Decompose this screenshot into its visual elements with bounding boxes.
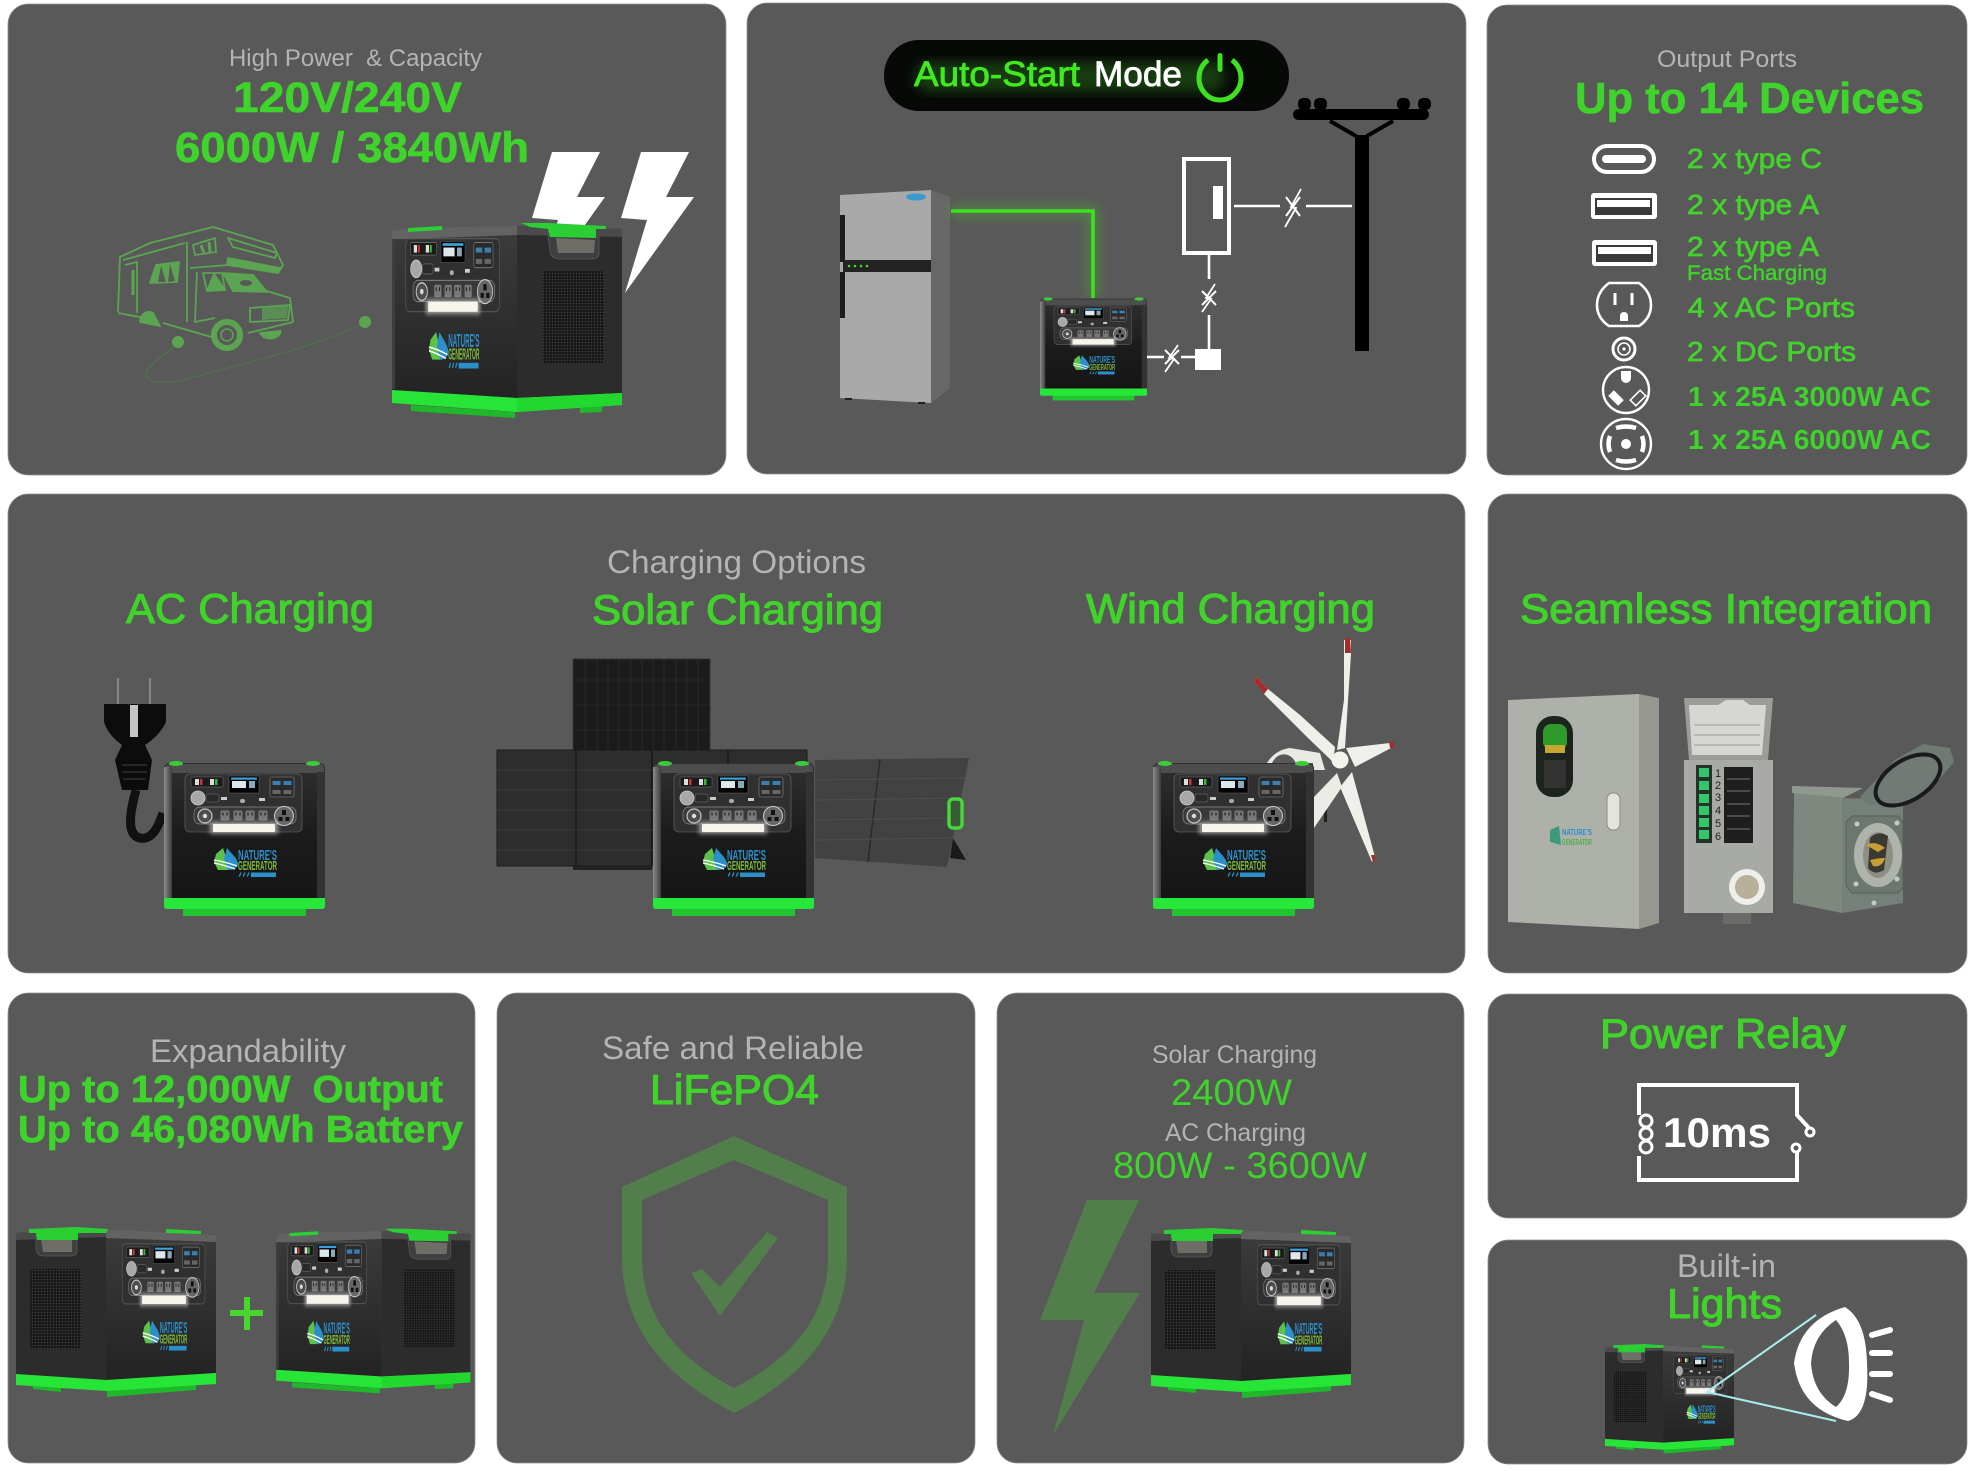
breaker panel: 3: [1715, 792, 1721, 804]
green power line: [951, 211, 1093, 298]
port label: type A fast charging: Fast Charging: [1687, 262, 1827, 285]
panel: safe and reliable: [497, 993, 975, 1463]
plus sign: [230, 1297, 263, 1330]
power station: AC: NATURE'S: [238, 847, 277, 864]
output value: Up to 12,000W Output: [18, 1069, 443, 1111]
label: AC charging: AC Charging: [126, 585, 374, 632]
icon: 25A 3000W outlet: [1603, 367, 1649, 413]
heading: seamless integration: Seamless Integration: [1520, 585, 1932, 632]
heading: output ports: Output Ports: [1657, 46, 1797, 73]
heading: AC charging: AC Charging: [1165, 1119, 1306, 1147]
power station: [1151, 1228, 1351, 1398]
circuit wiring with breaks: [1147, 189, 1352, 372]
power station: solar: [653, 761, 814, 916]
heading: High Power & Capacity: High Power & Capacity: [229, 45, 482, 72]
power station: right unit: GENERATOR: [324, 1333, 350, 1348]
wind turbine: [1253, 638, 1394, 862]
value: 10ms: 10ms: [1663, 1109, 1771, 1156]
panel: power relay: [1488, 994, 1967, 1218]
power station small: [1040, 297, 1147, 400]
power station: left unit: GENERATOR: [160, 1333, 187, 1347]
power station: left unit: [16, 1227, 216, 1397]
heading: power relay: Power Relay: [1600, 1010, 1846, 1057]
power station: solar: GENERATOR: [727, 859, 766, 873]
power station small: GENERATOR: [1089, 362, 1115, 372]
power station product: [392, 223, 622, 418]
battery value: Up to 46,080Wh Battery: [18, 1109, 463, 1151]
icon: shield with check: [622, 1136, 847, 1413]
breaker panel: 5: [1715, 818, 1721, 830]
power and capacity value: 6000W / 3840Wh: [175, 124, 529, 172]
power station small: GENERATOR: [1698, 1412, 1715, 1421]
icon: motorhome outline: [118, 227, 371, 382]
relay diagram: [1639, 1085, 1814, 1180]
breaker panel: 6: [1715, 831, 1721, 843]
port label: type A fast charging: [1687, 231, 1827, 285]
transfer cabinet: [1508, 694, 1659, 929]
port label: type A fast charging: 2 x type A: [1687, 231, 1819, 262]
auto-start mode pill: Auto-Start: [914, 55, 1080, 94]
power station: wind: [1153, 761, 1314, 916]
transfer switch box: [1184, 159, 1229, 253]
label: lights: Lights: [1667, 1280, 1782, 1327]
heading: charging options: Charging Options: [607, 544, 866, 580]
heading: safe and reliable: Safe and Reliable: [602, 1030, 864, 1066]
power station: AC: GENERATOR: [238, 859, 277, 873]
port label: DC ports: 2 x DC Ports: [1687, 336, 1856, 367]
power station small: NATURE'S: [1698, 1403, 1716, 1415]
port label: 25A 3000W: 1 x 25A 3000W AC: [1688, 381, 1931, 412]
port label: 25A 6000W: 1 x 25A 6000W AC: [1688, 424, 1931, 455]
power station product: NATURE'S: [448, 332, 479, 352]
refrigerator: [840, 190, 950, 404]
icon: lightning bolts: [532, 152, 694, 293]
utility pole: [1293, 98, 1431, 351]
value: 2400W: 2400W: [1171, 1072, 1292, 1113]
label: solar charging: Solar Charging: [592, 586, 883, 633]
AC plug and cable: [104, 678, 166, 838]
panel: auto-start mode: [747, 3, 1466, 474]
transfer cabinet: GENERATOR: [1562, 838, 1592, 847]
auto-start mode pill: Mode: [1094, 55, 1182, 94]
panel: built-in lights: [1488, 1240, 1967, 1464]
icon: type A port: [1591, 193, 1657, 219]
auto-start mode pill: [884, 40, 1289, 111]
panel: charging options: [8, 494, 1465, 973]
panel: seamless integration: [1488, 494, 1967, 973]
power inlet box: [1792, 744, 1954, 913]
voltage value: 120V/240V: [233, 74, 462, 122]
solar panels: [497, 659, 969, 870]
breaker panel: [1684, 698, 1773, 924]
heading: expandability: Expandability: [150, 1033, 346, 1069]
label: LiFePO4: LiFePO4: [650, 1066, 819, 1113]
power station: solar: NATURE'S: [727, 847, 766, 864]
value: 800W - 3600W: 800W - 3600W: [1113, 1145, 1367, 1186]
breaker panel: 4: [1715, 805, 1721, 817]
icon: type C port: [1594, 146, 1654, 172]
headline: up to 14 devices: Up to 14 Devices: [1575, 74, 1924, 123]
power station: right unit: [276, 1229, 470, 1393]
power station small: NATURE'S: [1089, 355, 1115, 366]
heading: built-in: Built-in: [1677, 1248, 1776, 1284]
heading: solar charging: Solar Charging: [1152, 1041, 1317, 1069]
light beam lines: [1707, 1315, 1836, 1421]
breaker panel: 1: [1715, 768, 1721, 780]
icon: DC port: [1613, 338, 1635, 360]
power station: left unit: NATURE'S: [160, 1319, 187, 1336]
breaker panel: 2: [1715, 780, 1721, 792]
port label: type C: 2 x type C: [1687, 143, 1822, 174]
power station: NATURE'S: [1295, 1320, 1322, 1337]
icon: 25A 6000W outlet: [1601, 419, 1651, 469]
power station: right unit: NATURE'S: [324, 1319, 350, 1337]
power station product: GENERATOR: [448, 345, 480, 363]
icon: headlight: [1794, 1307, 1890, 1421]
icon: AC outlet: [1597, 283, 1651, 326]
label: wind charging: Wind Charging: [1086, 585, 1375, 632]
panel: high power and capacity: [8, 4, 726, 475]
transfer cabinet: NATURE'S: [1562, 827, 1592, 837]
icon: type A fast port: [1592, 240, 1657, 266]
panel: output ports: [1487, 5, 1967, 475]
port label: type A: 2 x type A: [1687, 189, 1819, 220]
power station: wind: GENERATOR: [1227, 859, 1266, 873]
icon: lightning bolt: [1040, 1200, 1140, 1435]
power station: GENERATOR: [1295, 1334, 1322, 1348]
panel: charging rates: [997, 993, 1464, 1463]
power station: AC: [164, 761, 325, 916]
panel: expandability: [8, 993, 475, 1463]
power station small: [1605, 1344, 1734, 1454]
power station: wind: NATURE'S: [1227, 847, 1266, 864]
port label: AC ports: 4 x AC Ports: [1688, 292, 1855, 323]
